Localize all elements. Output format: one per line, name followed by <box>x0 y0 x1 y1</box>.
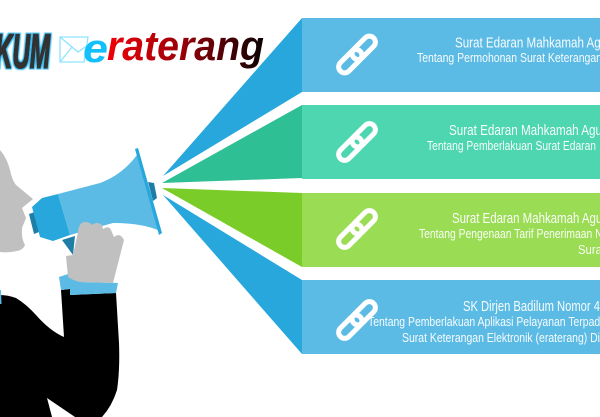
icon: link <box>336 208 378 250</box>
horn <box>58 155 158 235</box>
beam: blue bottom <box>163 195 304 354</box>
cuff <box>59 274 118 295</box>
icon: link <box>336 299 378 341</box>
icon: envelope <box>60 37 88 62</box>
megaphone <box>29 148 162 255</box>
jacket <box>0 289 119 417</box>
panel: circular three <box>302 193 600 267</box>
wordmark: raterang <box>107 22 264 69</box>
panel: circular one <box>302 18 600 92</box>
panel: circular two <box>302 105 600 179</box>
beam: blue top <box>163 18 304 176</box>
back cap <box>29 212 39 234</box>
beam: green <box>162 105 304 183</box>
front cap <box>148 182 157 201</box>
shirt collar <box>0 290 2 304</box>
icon: link <box>336 121 378 163</box>
body <box>32 194 70 241</box>
handle <box>62 236 75 255</box>
panel: decree <box>302 280 600 354</box>
beam: lime <box>162 188 304 267</box>
head <box>0 150 33 252</box>
rim <box>135 148 162 235</box>
person with megaphone <box>0 148 162 417</box>
logo: eraterang <box>60 22 264 71</box>
hand <box>66 222 124 283</box>
icon: link <box>336 34 378 75</box>
letter e: e <box>83 27 108 71</box>
